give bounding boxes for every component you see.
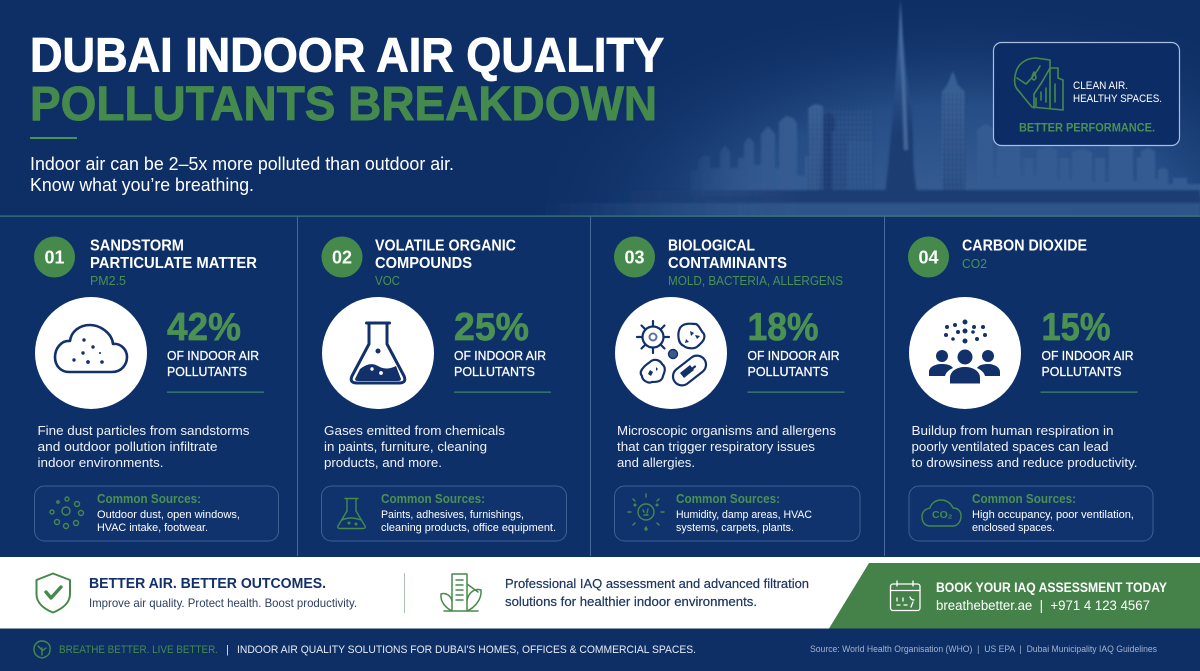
description — [912, 423, 1138, 470]
number badge 02 — [322, 236, 362, 278]
heading: CONTAMINANTS — [668, 255, 787, 272]
heading: PM2.5 — [90, 274, 126, 288]
heading — [962, 238, 1087, 271]
description: Microscopic organisms and allergens — [617, 423, 836, 438]
common sources box: cleaning products, office equipment. — [381, 522, 556, 534]
common sources box: HVAC intake, footwear. — [97, 522, 208, 534]
stat 42% — [167, 306, 264, 393]
panel: biological contaminants — [591, 217, 884, 556]
stat 15%: 15% — [1042, 306, 1110, 349]
stat 25% — [454, 306, 551, 393]
panel: carbon dioxide — [885, 217, 1200, 556]
heading: CARBON DIOXIDE — [962, 238, 1087, 254]
common sources box: Outdoor dust, open windows, — [97, 509, 240, 521]
number badge 03 — [614, 236, 655, 278]
stat 18%: 18% — [748, 306, 818, 349]
skyline illustration — [540, 0, 1200, 216]
description: products, and more. — [324, 455, 442, 470]
stat 25%: 25% — [454, 306, 529, 349]
badge text — [1019, 80, 1162, 134]
number badge 03: 03 — [624, 248, 645, 268]
stat 25%: OF INDOOR AIR — [454, 348, 546, 363]
outcomes band — [0, 557, 1200, 628]
footer — [0, 629, 1200, 671]
stat 15%: OF INDOOR AIR — [1042, 348, 1134, 363]
call to action: BOOK YOUR IAQ ASSESSMENT TODAY — [936, 580, 1167, 595]
heading: CO2 — [962, 257, 987, 271]
title — [30, 30, 664, 131]
common sources box — [614, 486, 860, 541]
call to action: breathebetter.ae | +971 4 123 4567 — [936, 598, 1150, 613]
common sources box: Common Sources: — [676, 492, 780, 506]
number badge 01: 01 — [44, 248, 65, 268]
icon: dust cloud — [35, 297, 147, 409]
badge text: HEALTHY SPACES. — [1073, 93, 1162, 105]
icon: flask — [322, 297, 434, 409]
outcomes text: Improve air quality. Protect health. Boost productivity. — [89, 596, 357, 610]
badge text: CLEAN AIR. — [1073, 80, 1128, 92]
icon: leaf — [34, 641, 50, 658]
outcomes text: BETTER AIR. BETTER OUTCOMES. — [89, 576, 326, 592]
common sources box: enclosed spaces. — [972, 522, 1055, 534]
assessment text — [505, 576, 809, 609]
stat 25%: POLLUTANTS — [454, 364, 535, 379]
heading — [90, 238, 257, 288]
assessment text: solutions for healthier indoor environments. — [505, 594, 757, 609]
number badge 02: 02 — [332, 248, 352, 268]
number badge 04: 04 — [918, 248, 939, 268]
description — [38, 423, 250, 470]
heading — [375, 238, 516, 288]
stat 15%: POLLUTANTS — [1042, 364, 1122, 379]
description: indoor environments. — [38, 455, 164, 470]
description: in paints, furniture, cleaning — [324, 439, 487, 454]
icon: CO2 cloud — [922, 500, 961, 526]
subtitle: Indoor air can be 2–5x more polluted than outdoor air. — [30, 153, 454, 174]
common sources box — [322, 486, 566, 541]
subtitle — [30, 153, 454, 195]
source note: Source: World Health Organisation (WHO) | US EPA | Dubai Municipality IAQ Guidelines — [810, 644, 1157, 654]
heading: PARTICULATE MATTER — [90, 255, 257, 272]
heading: SANDSTORM — [90, 238, 184, 254]
description — [617, 423, 836, 470]
common sources box: Paints, adhesives, furnishings, — [381, 509, 524, 521]
footer tagline — [59, 644, 696, 656]
assessment text: Professional IAQ assessment and advanced filtration — [505, 576, 809, 591]
description: to drowsiness and reduce productivity. — [912, 455, 1138, 470]
title: POLLUTANTS BREAKDOWN — [30, 78, 657, 131]
outcomes text — [89, 576, 357, 610]
stat 42%: 42% — [167, 306, 241, 349]
heading: BIOLOGICAL — [668, 238, 755, 254]
description: and allergies. — [617, 455, 695, 470]
description — [324, 423, 505, 470]
stat 42%: POLLUTANTS — [167, 364, 247, 379]
stat 18% — [748, 306, 844, 393]
icon: calendar — [890, 581, 920, 610]
icon: dust particles — [50, 497, 84, 528]
common sources box: Humidity, damp areas, HVAC — [676, 509, 812, 521]
heading — [668, 238, 843, 288]
subtitle: Know what you’re breathing. — [30, 174, 254, 195]
badge: clean air — [994, 42, 1180, 146]
icon: people and CO2 — [909, 297, 1021, 409]
number badge 01 — [34, 236, 75, 278]
icon: shield — [36, 574, 70, 612]
common sources box — [909, 486, 1153, 541]
icon: green building — [441, 574, 481, 611]
common sources box: systems, carpets, plants. — [676, 522, 794, 534]
stat 18%: OF INDOOR AIR — [748, 348, 840, 363]
common sources box: Common Sources: — [381, 492, 485, 506]
common sources box: Common Sources: — [972, 492, 1076, 506]
stat 42%: OF INDOOR AIR — [167, 348, 259, 363]
panel: volatile organic compounds — [298, 217, 590, 556]
common sources box: Common Sources: — [97, 492, 201, 506]
common sources box: High occupancy, poor ventilation, — [972, 509, 1134, 521]
common sources box — [34, 486, 278, 541]
panel: sandstorm particulate matter — [0, 217, 297, 556]
description: that can trigger respiratory issues — [617, 439, 815, 454]
icon: microbes — [615, 297, 727, 409]
description: poorly ventilated spaces can lead — [912, 439, 1108, 454]
number badge 04 — [908, 236, 949, 278]
icon: head and building — [1015, 58, 1063, 110]
heading: VOC — [375, 274, 400, 288]
icon: airborne spores — [628, 494, 664, 530]
title: DUBAI INDOOR AIR QUALITY — [30, 30, 664, 82]
badge text: BETTER PERFORMANCE. — [1019, 122, 1155, 134]
heading: COMPOUNDS — [375, 255, 472, 272]
description: Gases emitted from chemicals — [324, 423, 505, 438]
heading: MOLD, BACTERIA, ALLERGENS — [668, 274, 843, 288]
call to action — [829, 563, 1200, 628]
description: Buildup from human respiration in — [912, 423, 1114, 438]
footer tagline: INDOOR AIR QUALITY SOLUTIONS FOR DUBAI'S HOMES, OFFICES & COMMERCIAL SPACES. — [237, 644, 696, 656]
footer tagline: BREATHE BETTER. LIVE BETTER. — [59, 644, 218, 656]
stat 18%: POLLUTANTS — [748, 364, 829, 379]
description: and outdoor pollution infiltrate — [38, 439, 218, 454]
icon: CO2 cloud: CO₂ — [932, 509, 953, 521]
heading: VOLATILE ORGANIC — [375, 238, 516, 254]
icon: small flask — [338, 498, 365, 528]
footer tagline: | — [226, 644, 229, 656]
header panel — [0, 0, 1200, 216]
description: Fine dust particles from sandstorms — [38, 423, 250, 438]
stat 15% — [1040, 306, 1138, 393]
